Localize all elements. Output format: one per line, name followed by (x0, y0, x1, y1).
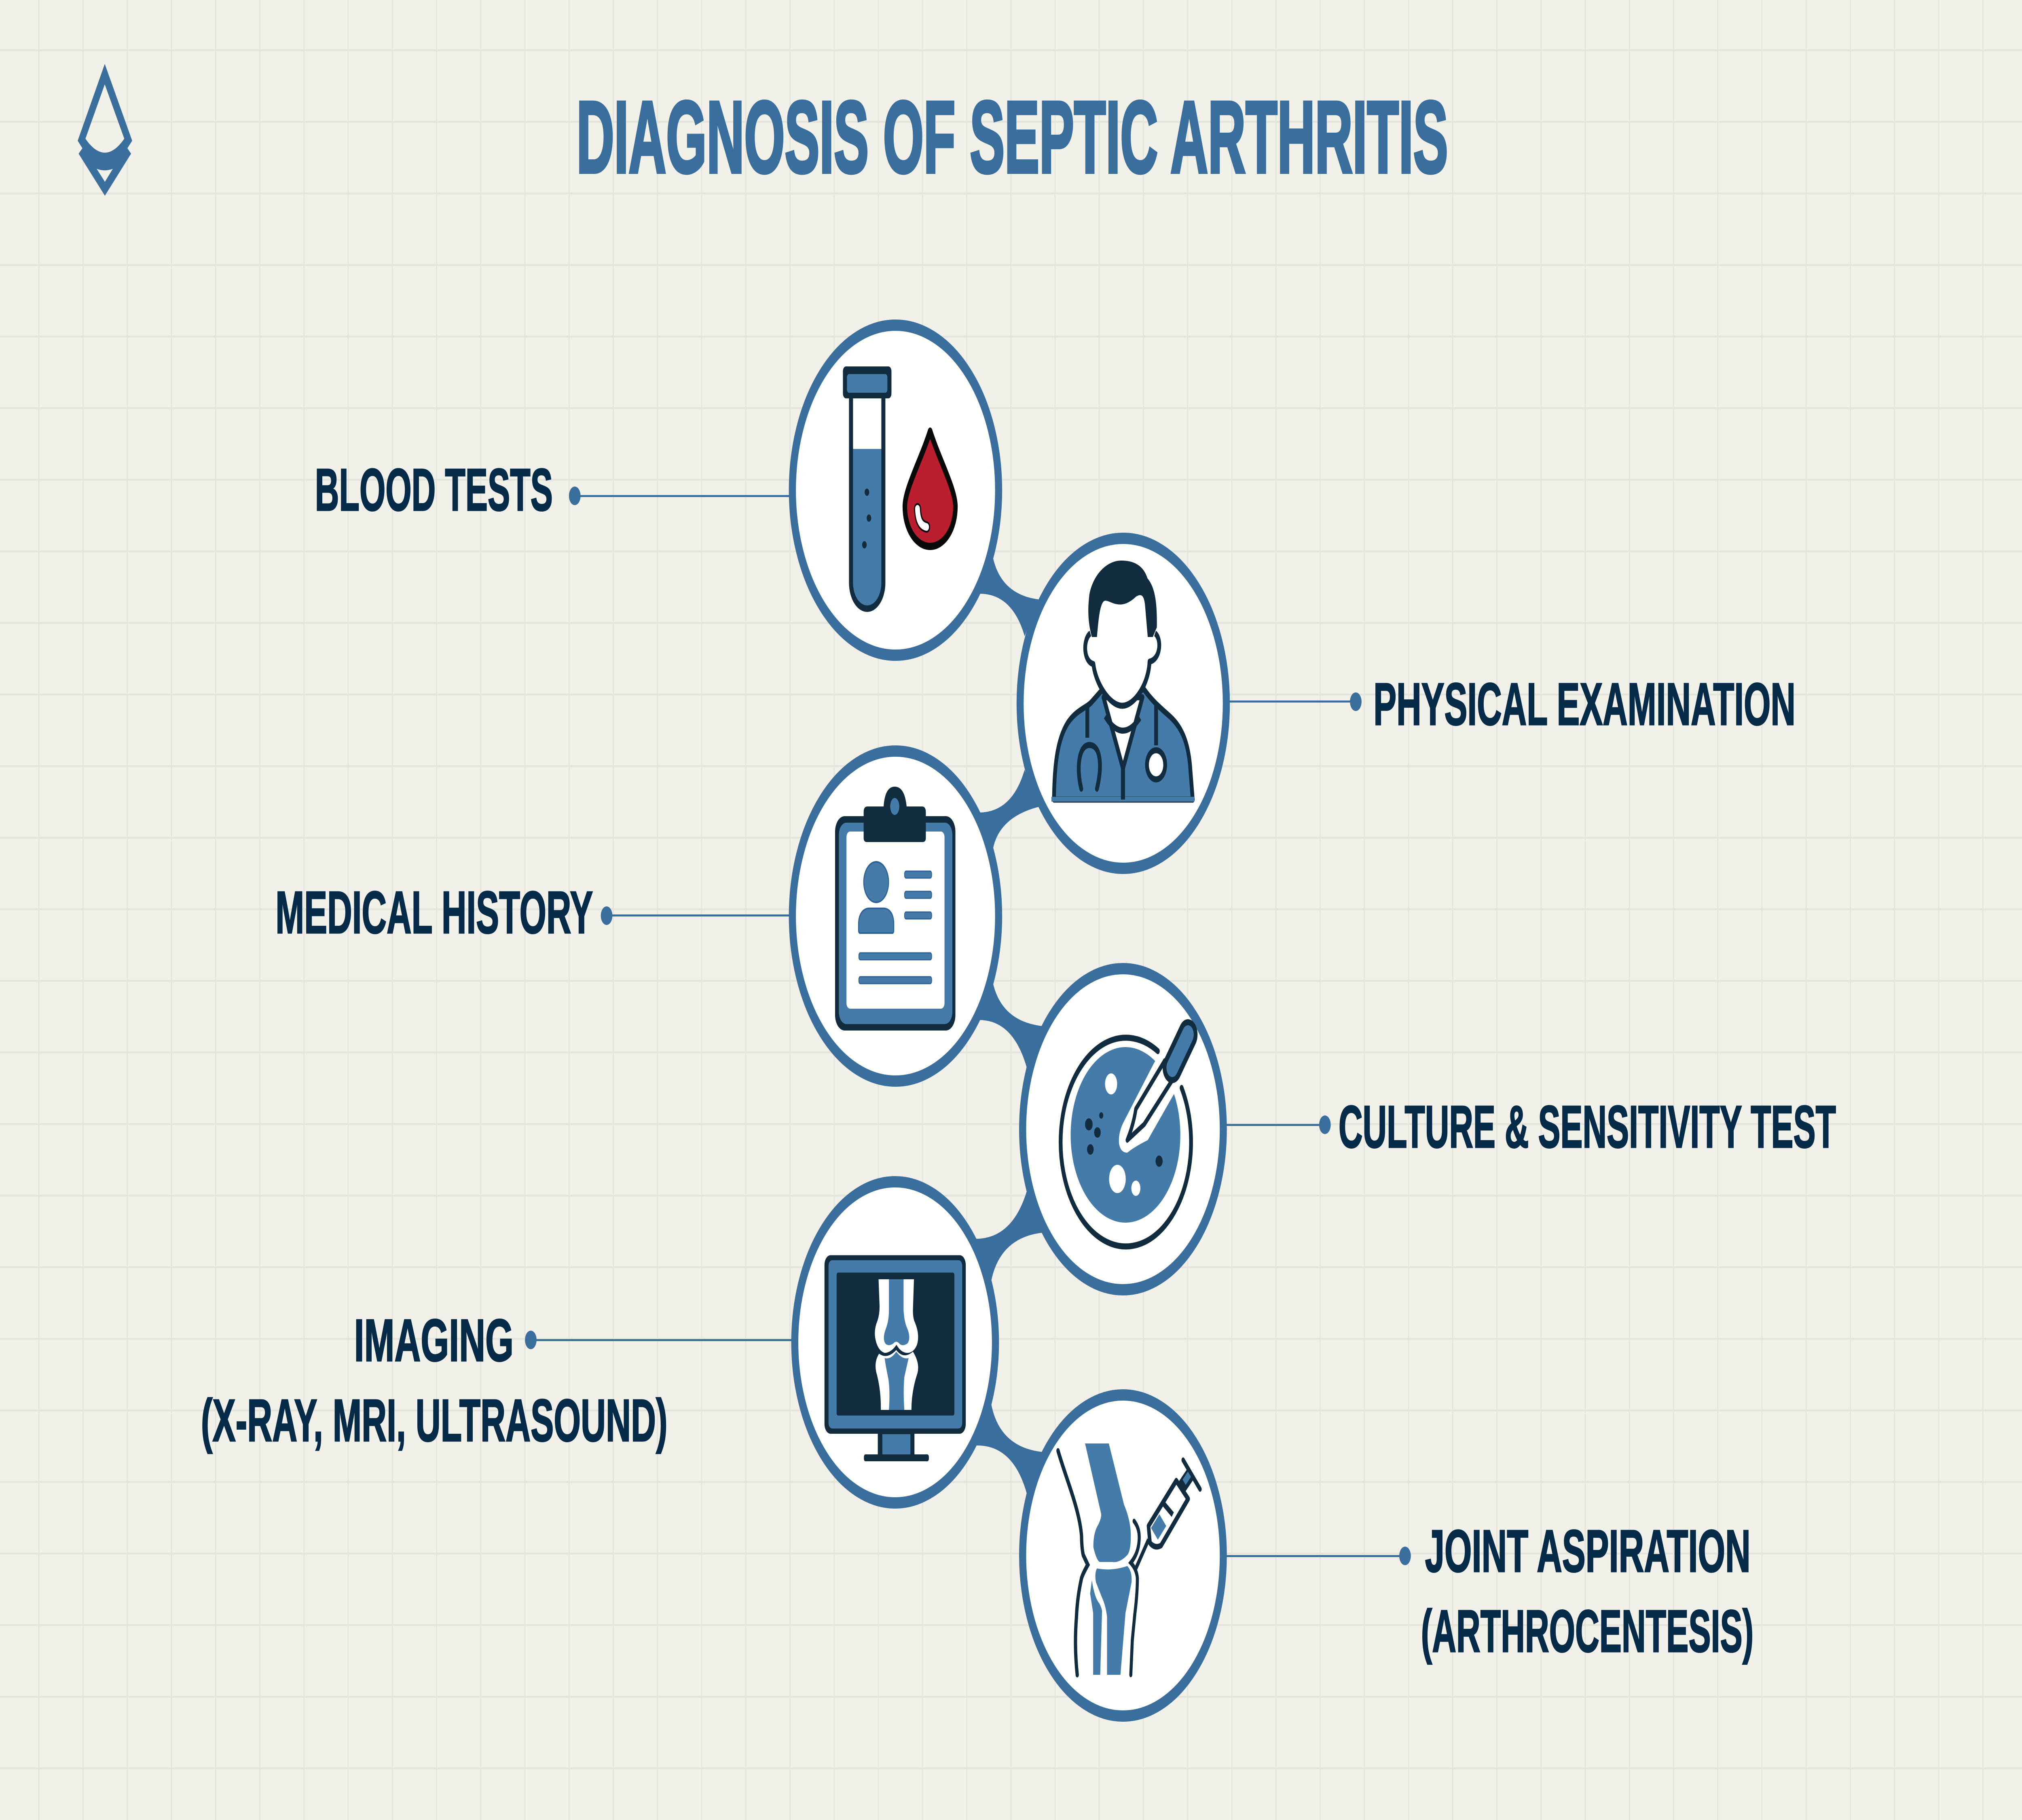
label: joint aspiration: (ARTHROCENTESIS) (1421, 1598, 1753, 1665)
title: DIAGNOSIS OF SEPTIC ARTHRITIS (577, 80, 1448, 194)
leader: joint aspiration (1223, 1547, 1411, 1565)
label: blood tests: BLOOD TESTS (315, 457, 553, 523)
logo (78, 64, 132, 196)
panel: blood tests icon (792, 325, 998, 655)
icon: x-ray monitor (825, 1255, 966, 1461)
panel: joint aspiration icon (1023, 1395, 1223, 1716)
icon: test tube (843, 366, 891, 612)
icon: knee joint and syringe (1058, 1443, 1200, 1675)
leader: culture and sensitivity test (1223, 1115, 1331, 1134)
label: culture and sensitivity test: CULTURE & SENSITIVITY TEST (1339, 1094, 1836, 1160)
connectors between circles (976, 557, 1042, 1493)
panel: culture and sensitivity icon (1023, 969, 1223, 1290)
icon: petri dish and dropper (1061, 1035, 1191, 1246)
label: joint aspiration (1421, 1518, 1753, 1665)
panel: imaging icon (795, 1182, 996, 1503)
label: imaging: (X-RAY, MRI, ULTRASOUND) (201, 1387, 668, 1454)
leader: medical history (601, 906, 792, 925)
label: medical history: MEDICAL HISTORY (275, 879, 593, 946)
leader: imaging (525, 1331, 793, 1349)
icon: doctor (1051, 561, 1194, 802)
label: imaging (201, 1307, 668, 1454)
label: joint aspiration: JOINT ASPIRATION (1425, 1518, 1751, 1585)
label: imaging: IMAGING (354, 1307, 514, 1374)
leader: physical examination (1226, 692, 1362, 711)
panel: physical examination icon (1020, 538, 1226, 868)
icon: blood drop (905, 431, 955, 546)
leader: blood tests (569, 487, 792, 505)
icon: clipboard (835, 787, 955, 1031)
label: physical examination: PHYSICAL EXAMINATION (1373, 671, 1796, 738)
panel: medical history icon (792, 751, 998, 1081)
